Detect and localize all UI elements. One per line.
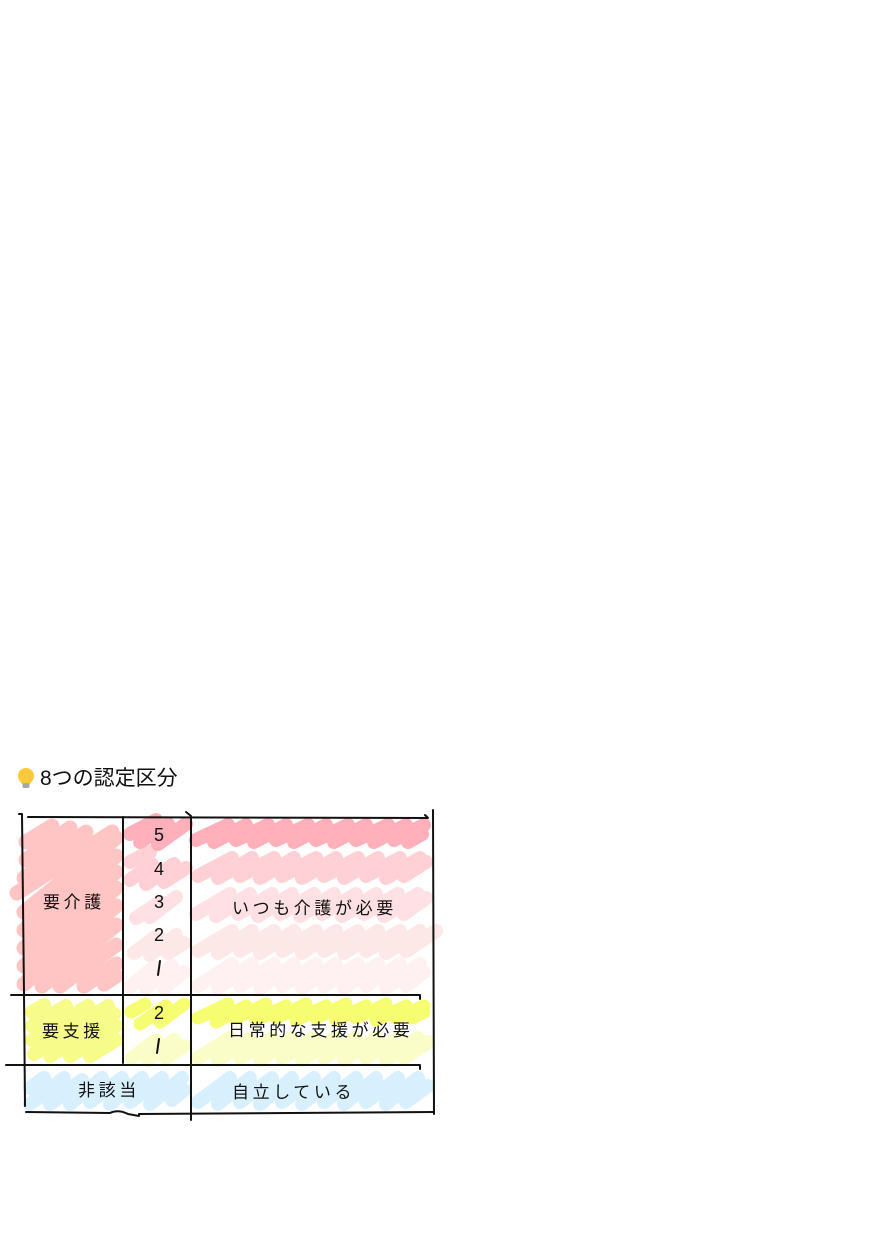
number: support 2: 2: [154, 1003, 164, 1023]
number: care 3: 3: [154, 892, 164, 912]
block: yoshien label background: [32, 1005, 116, 1056]
level numbers: [154, 825, 164, 1053]
cell labels: [42, 893, 413, 1102]
number: care 2: 2: [154, 925, 164, 945]
band: care level 3: [136, 894, 426, 918]
number: support 1: [157, 1039, 159, 1053]
band: support level 2: [131, 1004, 424, 1024]
label: independent: 自立している: [232, 1083, 355, 1102]
heading with light bulb: [18, 767, 178, 790]
number: care 1: [158, 961, 160, 975]
band: care level 4: [130, 852, 426, 884]
hand-drawn grid lines: [6, 810, 434, 1120]
band: care level 2: [134, 931, 436, 955]
number: care 4: 4: [154, 859, 164, 879]
label: always needs care: いつも介護が必要: [232, 899, 397, 918]
number: care 5: 5: [154, 825, 164, 845]
label: needs daily support: 日常的な支援が必要: [228, 1021, 413, 1040]
label: 要支援: 要支援: [42, 1022, 104, 1041]
band: care level 1: [130, 964, 424, 988]
band: support level 1: [132, 1038, 428, 1060]
icon: light bulb: [18, 768, 34, 788]
band: care level 5: [130, 820, 424, 844]
title: 8つの認定区分: [40, 767, 178, 790]
band: not applicable: [30, 1078, 428, 1104]
block: yokaigo label background: [17, 826, 116, 986]
label: 非該当: 非該当: [78, 1081, 140, 1100]
table: care level classification: [6, 810, 436, 1120]
label: 要介護: 要介護: [43, 893, 105, 912]
